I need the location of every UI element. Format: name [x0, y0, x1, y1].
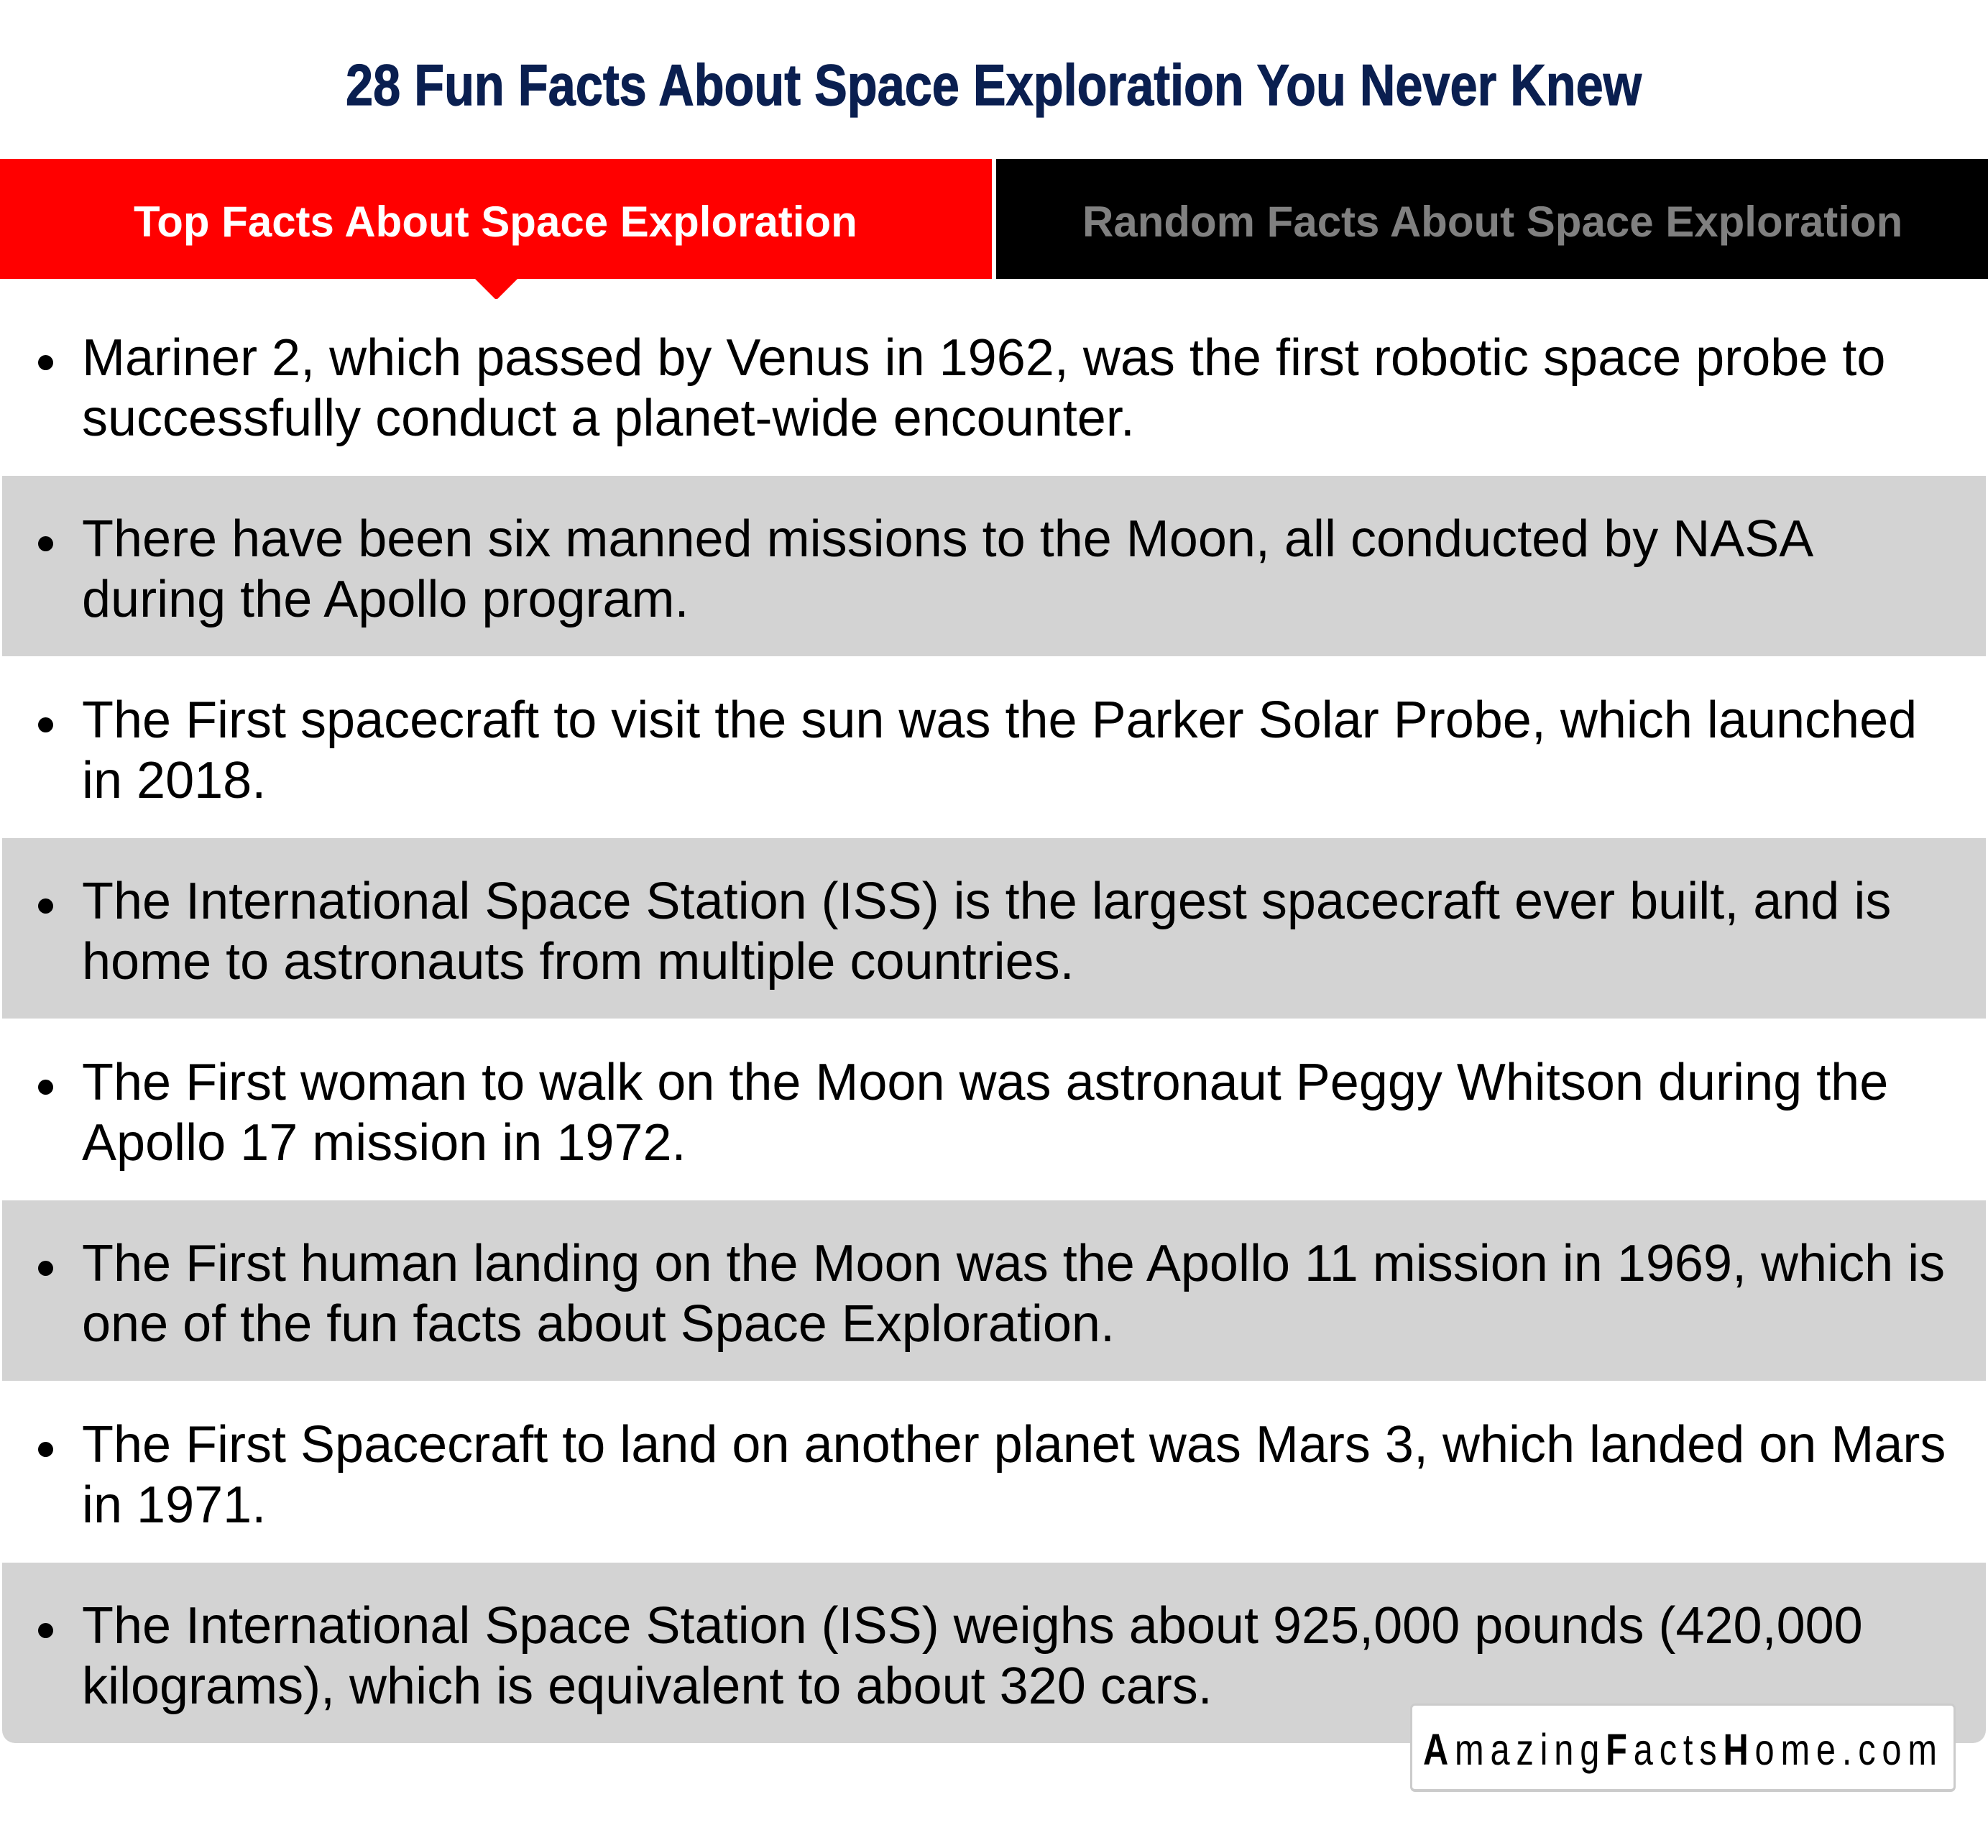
fact text [82, 329, 1885, 447]
fact text [82, 1416, 1946, 1534]
fact row 2 [2, 476, 1986, 656]
fact text: home to astronauts from multiple countries. [82, 933, 1074, 990]
fact text: Mariner 2, which passed by Venus in 1962, was the first robotic space probe to [82, 329, 1885, 387]
fact row 5 [38, 1054, 1888, 1172]
fact text: during the Apollo program. [82, 571, 689, 628]
bullet [38, 536, 53, 551]
title: 28 Fun Facts About Space Exploration You Never Knew [346, 53, 1642, 118]
active tab arrow [475, 279, 517, 299]
watermark text: AmazingFactsHome.com [1423, 1725, 1943, 1774]
fact text: There have been six manned missions to the Moon, all conducted by NASA [82, 510, 1813, 568]
fact text: kilograms), which is equivalent to about 320 cars. [82, 1658, 1212, 1715]
tab: random facts (inactive) [996, 159, 1988, 279]
bullet [38, 1080, 53, 1095]
fact text [82, 1054, 1888, 1172]
bullet [38, 355, 53, 370]
tab label: random facts: Random Facts About Space Exploration [1082, 198, 1902, 246]
fact text: The First Spacecraft to land on another planet was Mars 3, which landed on Mars [82, 1416, 1946, 1474]
fact text: The First woman to walk on the Moon was astronaut Peggy Whitson during the [82, 1054, 1888, 1111]
fact row 8 [2, 1563, 1986, 1743]
fact text: The First human landing on the Moon was the Apollo 11 mission in 1969, which is [82, 1235, 1945, 1292]
bullet [38, 898, 53, 914]
fact text: Apollo 17 mission in 1972. [82, 1114, 686, 1172]
fact row 7 [38, 1416, 1946, 1534]
bullet [38, 717, 53, 732]
fact row 4 [2, 838, 1986, 1019]
fact text: successfully conduct a planet-wide encounter. [82, 390, 1135, 447]
fact text: The International Space Station (ISS) is the largest spacecraft ever built, and is [82, 873, 1891, 930]
fact text: one of the fun facts about Space Exploration. [82, 1295, 1115, 1353]
fact text: in 1971. [82, 1476, 266, 1534]
fact text [82, 691, 1917, 809]
fact row 3 [38, 691, 1917, 809]
fact text [82, 1235, 1945, 1353]
bullet [38, 1261, 53, 1276]
fact text [82, 1597, 1863, 1715]
watermark badge [1410, 1704, 1956, 1792]
bullet [38, 1442, 53, 1457]
fact text: The International Space Station (ISS) weighs about 925,000 pounds (420,000 [82, 1597, 1863, 1655]
tab label: top facts: Top Facts About Space Exploration [134, 198, 857, 246]
fact text [82, 510, 1814, 628]
bullet [38, 1623, 53, 1638]
fact text: The First spacecraft to visit the sun was the Parker Solar Probe, which launched [82, 691, 1917, 749]
tab: top facts (active) [0, 159, 992, 279]
fact text: in 2018. [82, 752, 266, 809]
fact row 1 [38, 329, 1885, 447]
fact text [82, 873, 1891, 990]
fact row 6 [2, 1200, 1986, 1381]
